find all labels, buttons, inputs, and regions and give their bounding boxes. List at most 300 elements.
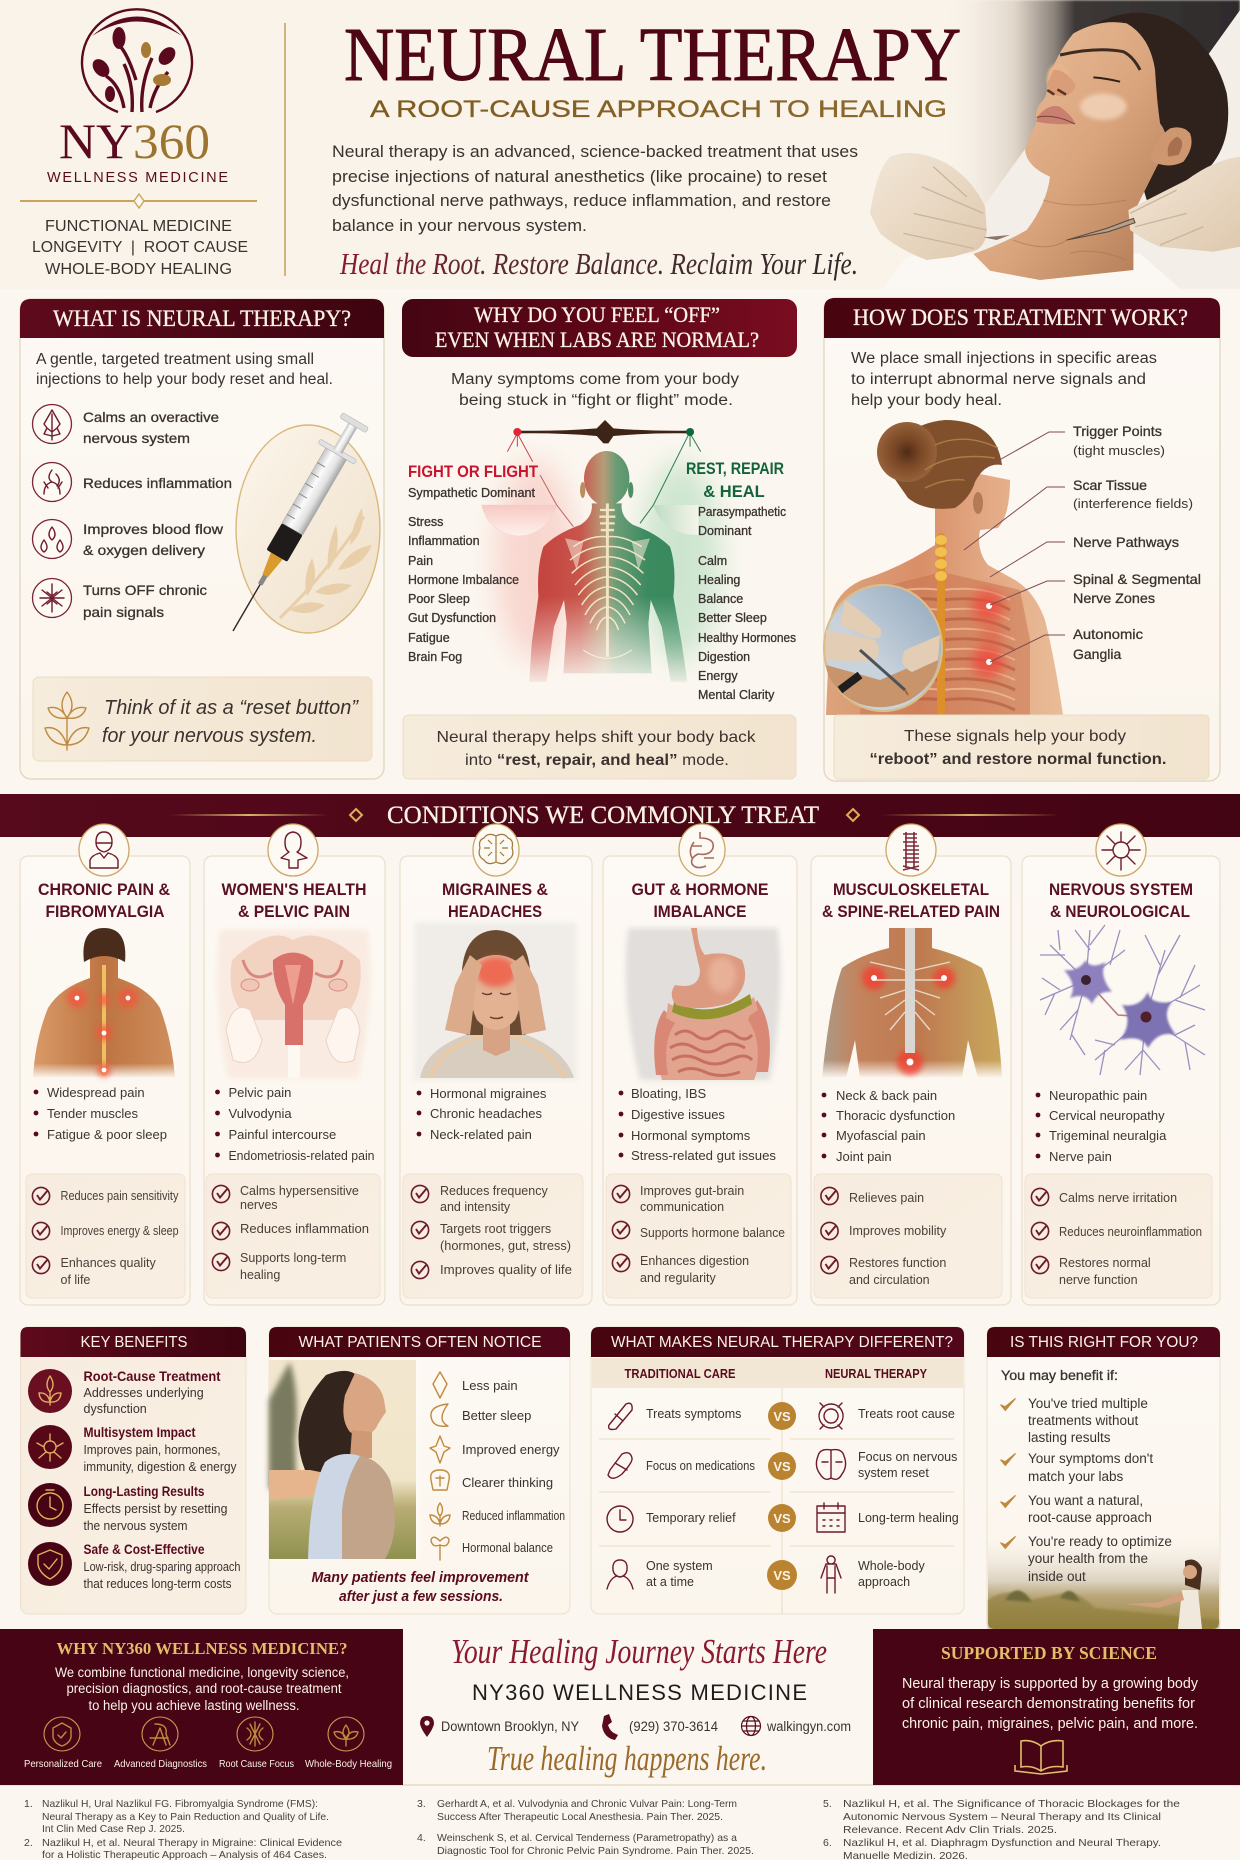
symptoms list: Chronic headaches [430, 1106, 543, 1121]
benefits box: (hormones, gut, stress) [440, 1239, 571, 1253]
leader lines [964, 432, 1065, 662]
benefit text: blood flow [83, 521, 224, 558]
callout text: for your nervous system. [102, 725, 317, 747]
references column 1: Neural Therapy as a Key to Pain Reduction and Quality of Life. [42, 1811, 329, 1823]
caption: Many patients feel improvement [312, 1570, 530, 1586]
symptoms list: Digestive issues [631, 1107, 725, 1122]
gold divider with diamond [20, 194, 257, 208]
benefits box: and regularity [640, 1271, 716, 1285]
rest repair list: Energy [698, 669, 738, 683]
references column 2: Success After Therapeutic Local Anesthesia. Pain Ther. 2025. [437, 1811, 723, 1823]
icons row [44, 1717, 364, 1751]
intro paragraph: dysfunctional nerve pathways, reduce inflammation, and restore [332, 191, 831, 210]
card title: WOMEN'S HEALTH [222, 880, 366, 899]
labels: Scar Tissue [1073, 477, 1147, 493]
card title: & NEUROLOGICAL [1050, 902, 1190, 921]
fight or flight list [408, 463, 538, 664]
benefits box: Improves gut-brain [640, 1184, 744, 1198]
benefit: long-lasting results: the nervous system [84, 1519, 188, 1533]
fight or flight list: Poor Sleep [408, 592, 470, 606]
panel heading: IS THIS RIGHT FOR YOU? [1010, 1334, 1198, 1351]
benefit text: calms: nervous system [83, 430, 190, 446]
symptoms list: Joint pain [836, 1149, 892, 1164]
fight or flight list: Stress [408, 515, 443, 529]
panel heading: WHAT PATIENTS OFTEN NOTICE [298, 1334, 542, 1351]
rest repair list: Better Sleep [698, 611, 767, 625]
panel: contact: Your Healing Journey Starts Here [451, 1632, 827, 1671]
paragraph: precision diagnostics, and root-cause treatment [66, 1681, 342, 1696]
benefits box: Targets root triggers [440, 1222, 551, 1236]
title: NEURAL THERAPY [344, 13, 961, 97]
references column 2: Weinschenk S, et al. Cervical Tenderness (Parametropathy) as a [437, 1832, 737, 1844]
list text: Less pain [462, 1378, 518, 1393]
photo: woman breathing outdoors [269, 1360, 420, 1559]
symptoms list [34, 1085, 167, 1142]
symptoms list: Nerve pain [1049, 1149, 1112, 1164]
benefit text: pain signals: pain signals [83, 604, 164, 620]
benefit text: calms [83, 409, 219, 446]
comparison row 3: VS [773, 1511, 791, 1526]
rest repair list: Healing [698, 573, 740, 587]
benefits box: Enhances quality [60, 1256, 156, 1270]
illustration: back with spine pain points [33, 928, 175, 1078]
list text: Clearer thinking [462, 1475, 553, 1490]
contact row: walkingyn.com [766, 1719, 851, 1734]
symptoms list: Bloating, IBS [631, 1086, 706, 1101]
illustration: woman with headache [414, 922, 577, 1080]
band heading: CONDITIONS WE COMMONLY TREAT [387, 802, 819, 829]
icon: brain [473, 824, 519, 876]
panel: how does treatment work [824, 298, 1220, 781]
card title [442, 880, 548, 921]
intro text: to interrupt abnormal nerve signals and [851, 371, 1146, 388]
benefit: long-lasting results [28, 1483, 228, 1533]
list icons [430, 1372, 450, 1560]
labels: Nerve Pathways [1073, 534, 1179, 550]
comparison row 1: VS [773, 1409, 791, 1424]
panel heading: EVEN WHEN LABS ARE NORMAL? [435, 327, 759, 352]
benefits box [26, 1174, 185, 1298]
comparison row 3 [607, 1503, 959, 1532]
references column 2: 4. [417, 1832, 426, 1844]
logo wordmark NY360: NY360 [59, 113, 210, 169]
comparison row 4: approach [858, 1575, 910, 1589]
checklist: You've tried multiple [1028, 1396, 1148, 1411]
panel: what makes neural therapy different [591, 1327, 964, 1614]
callout text: Think of it as a “reset button” [104, 697, 359, 719]
labels: Nerve Zones [1073, 590, 1155, 606]
comparison row 2: Focus on nervous [858, 1450, 957, 1464]
comparison row 4: at a time [646, 1575, 694, 1589]
checklist: inside out [1028, 1569, 1086, 1584]
benefit text: blood flow: & oxygen delivery [83, 542, 205, 558]
rest repair list: Healthy Hormones [698, 631, 796, 645]
intro text [451, 371, 739, 409]
panel: contact [420, 1632, 851, 1778]
benefit text: pain signals [83, 582, 207, 620]
benefit: multisystem impact: immunity, digestion & energy [84, 1460, 237, 1474]
references column 1: Nazlikul H, et al. Neural Therapy in Migraine: Clinical Evidence [42, 1837, 342, 1849]
fight or flight list: Hormone Imbalance [408, 573, 519, 587]
fight or flight list: Inflammation [408, 534, 480, 548]
icon: intestines [679, 824, 725, 876]
intro paragraph: balance in your nervous system. [332, 216, 587, 235]
references column 2: 3. [417, 1798, 426, 1810]
card title: & PELVIC PAIN [238, 902, 350, 921]
card title: MUSCULOSKELETAL [833, 880, 989, 899]
checklist: match your labs [1028, 1469, 1124, 1484]
comparison row 1 [609, 1402, 955, 1430]
benefit: safe and cost-effective: that reduces long-term costs [84, 1577, 232, 1591]
references column 3: Nazlikul H, et al. The Significance of Thoracic Blockages for the [843, 1798, 1180, 1810]
symptoms list: Widespread pain [47, 1085, 145, 1100]
body illustration with balance scale [482, 420, 720, 682]
panel heading: KEY BENEFITS [80, 1334, 188, 1351]
header photo: neural therapy injection in neck [840, 0, 1240, 302]
callout: reset button [33, 677, 372, 761]
callout: reboot [834, 715, 1209, 779]
benefits box: and intensity [440, 1200, 511, 1214]
benefits box [1025, 1174, 1212, 1298]
logo taglines [32, 218, 248, 278]
fight or flight list: Fatigue [408, 631, 450, 645]
symptoms list: Cervical neuropathy [1049, 1108, 1165, 1123]
panel heading [402, 299, 797, 357]
list text: Improved energy [462, 1442, 560, 1457]
symptoms list: Stress-related gut issues [631, 1148, 776, 1163]
benefits box: communication [640, 1200, 724, 1214]
benefit: safe and cost-effective: Safe & Cost-Effective [84, 1542, 205, 1557]
panel heading [269, 1327, 570, 1357]
benefit text: pain signals: Turns OFF chronic [83, 582, 207, 598]
intro paragraph: Neural therapy is an advanced, science-backed treatment that uses [332, 142, 858, 161]
intro text: A gentle, targeted treatment using small [36, 351, 314, 368]
references column 3: Autonomic Nervous System – Neural Therapy and Its Clinical [843, 1811, 1161, 1823]
fight or flight list: Pain [408, 554, 433, 568]
benefit: root-cause treatment: Addresses underlying [84, 1386, 204, 1400]
paragraph: of clinical research demonstrating benefits for [902, 1696, 1195, 1712]
intro text: help your body heal. [851, 392, 1002, 409]
paragraph: Neural therapy is supported by a growing body [902, 1676, 1199, 1692]
symptoms list [822, 1088, 955, 1164]
rest repair list: Digestion [698, 650, 750, 664]
comparison row 4: One system [646, 1559, 713, 1573]
benefits box [403, 1174, 583, 1298]
checklist: You're ready to optimize [1028, 1534, 1172, 1549]
logo taglines: LONGEVITY | ROOT CAUSE [32, 239, 248, 256]
icon labels: Advanced Diagnostics [114, 1758, 207, 1770]
icon labels: Personalized Care [24, 1758, 102, 1770]
illustration: digestive system [626, 928, 780, 1080]
benefit: multisystem impact [28, 1425, 237, 1474]
card title [1049, 880, 1193, 921]
woman's back illustration [824, 420, 1063, 715]
icon: inflammation [32, 462, 72, 502]
callout: rest repair heal: into “rest, repair, and heal” mode. [465, 752, 729, 769]
logo wellness medicine: WELLNESS MEDICINE [47, 170, 228, 186]
symptoms list: Hormonal migraines [430, 1086, 547, 1101]
symptoms list: Pelvic pain [228, 1085, 291, 1100]
benefit: root-cause treatment: Root-Cause Treatment [84, 1369, 221, 1384]
panel: contact: NY360 WELLNESS MEDICINE [472, 1680, 807, 1705]
symptoms list: Painful intercourse [228, 1127, 336, 1142]
references column 3 [823, 1798, 1180, 1860]
labels: (interference fields) [1073, 496, 1193, 511]
benefits box: Reduces frequency [440, 1184, 548, 1198]
caption [312, 1570, 530, 1605]
intro text: being stuck in “fight or flight” mode. [459, 392, 733, 409]
callout: rest repair heal: Neural therapy helps shift your body back [436, 729, 757, 746]
card title: MIGRAINES & [442, 880, 548, 899]
illustration: pelvis and uterus [217, 930, 370, 1078]
benefit: long-lasting results: Effects persist by resetting [84, 1502, 228, 1516]
icon: open book [1015, 1741, 1067, 1774]
list text: Better sleep [462, 1408, 531, 1423]
checklist: treatments without [1028, 1413, 1139, 1428]
benefit: safe and cost-effective: Low-risk, drug-sparing approach [84, 1560, 241, 1574]
benefits box: Calms nerve irritation [1059, 1191, 1177, 1205]
tagline: Heal the Root. Restore Balance. Reclaim Your Life. [339, 246, 858, 281]
card title [822, 880, 1000, 921]
labels: (tight muscles) [1073, 443, 1165, 458]
references column 2 [417, 1798, 754, 1857]
intro text [851, 350, 1157, 409]
benefits box: of life [60, 1273, 90, 1287]
illustration: neurons [1040, 925, 1205, 1075]
references column 3: 5. [823, 1798, 832, 1810]
references column 1 [24, 1798, 342, 1860]
lead-in: You may benefit if: [1001, 1368, 1118, 1383]
card title: IMBALANCE [654, 902, 746, 921]
symptoms list [417, 1086, 547, 1142]
benefits box: Restores function [849, 1256, 946, 1270]
symptoms list [215, 1085, 374, 1163]
comparison row 2: VS [773, 1459, 791, 1474]
symptoms list: Neuropathic pain [1049, 1088, 1147, 1103]
comparison row 4: Whole-body [858, 1559, 925, 1573]
icon labels: Root Cause Focus [219, 1758, 294, 1770]
labels [1073, 423, 1201, 662]
benefits box: Reduces inflammation [240, 1222, 369, 1236]
panel heading [987, 1327, 1220, 1357]
caption: after just a few sessions. [339, 1589, 503, 1605]
benefit text: inflammation: Reduces inflammation [83, 475, 232, 491]
checklist [1001, 1396, 1172, 1584]
fight or flight list: FIGHT OR FLIGHT [408, 463, 538, 481]
card: nervous system [1022, 824, 1220, 1305]
card: gut and hormone imbalance [603, 824, 797, 1305]
icon labels [24, 1758, 392, 1770]
card: chronic pain and fibromyalgia [20, 824, 190, 1305]
footer band [0, 1629, 1240, 1786]
panel: why NY360 [0, 1629, 403, 1785]
comparison row 2: Focus on medications [646, 1459, 755, 1473]
references column 1: Nazlikul H, Ural Nazlikul FG. Fibromyalgia Syndrome (FMS): [42, 1798, 318, 1810]
fight or flight list: Gut Dysfunction [408, 611, 496, 625]
paragraph: to help you achieve lasting wellness. [88, 1698, 300, 1713]
comparison header: NEURAL THERAPY [825, 1367, 928, 1381]
benefits box [606, 1174, 791, 1298]
benefit: safe and cost-effective [28, 1542, 241, 1591]
symptoms list: Fatigue & poor sleep [47, 1127, 167, 1142]
header [0, 0, 1240, 302]
rest repair list: REST, REPAIR [686, 460, 784, 478]
icon: tree of life in circle [82, 9, 192, 112]
labels: Spinal & Segmental [1073, 571, 1201, 587]
card title [222, 880, 366, 921]
icon: neuron [1096, 824, 1146, 876]
logo taglines: FUNCTIONAL MEDICINE [45, 218, 232, 235]
panel: contact: True healing happens here. [487, 1739, 767, 1778]
comparison row 2: system reset [858, 1466, 929, 1480]
icon: person [79, 824, 129, 876]
benefits box: nerve function [1059, 1273, 1138, 1287]
checklist: root-cause approach [1028, 1510, 1152, 1525]
icon: pain signals [32, 578, 72, 618]
benefits box: Relieves pain [849, 1191, 924, 1205]
panel heading: WHY DO YOU FEEL “OFF” [474, 302, 720, 327]
references column 2: Gerhardt A, et al. Vulvodynia and Chronic Vulvar Pain: Long-Term [437, 1798, 737, 1810]
labels: Ganglia [1073, 646, 1121, 662]
benefits box [206, 1174, 380, 1298]
comparison row 3: Temporary relief [646, 1511, 736, 1525]
panel: what is neural therapy [20, 299, 384, 779]
paragraph [902, 1676, 1199, 1732]
logo [20, 9, 257, 278]
rest repair list: & HEAL [703, 483, 765, 501]
symptoms list: Thoracic dysfunction [836, 1108, 955, 1123]
comparison row 4: VS [773, 1568, 791, 1583]
card title: FIBROMYALGIA [46, 902, 164, 921]
references column 1: Int Clin Med Case Rep J. 2025. [42, 1823, 185, 1835]
icon: calms nervous system [32, 404, 72, 444]
callout: reboot: “reboot” and restore normal function. [870, 751, 1166, 768]
benefit: root-cause treatment: dysfunction [84, 1402, 147, 1416]
logo taglines: WHOLE-BODY HEALING [45, 261, 232, 278]
rest repair list: Mental Clarity [698, 688, 775, 702]
syringe illustration [215, 410, 380, 642]
panel: supported by science: SUPPORTED BY SCIENCE [941, 1643, 1157, 1663]
panel heading [824, 298, 1220, 338]
card title: CHRONIC PAIN & [38, 880, 170, 899]
panel: key benefits [20, 1327, 246, 1614]
intro text: We place small injections in specific areas [851, 350, 1157, 367]
panel heading: WHAT IS NEURAL THERAPY? [53, 306, 351, 331]
icon: blood flow [32, 520, 72, 558]
card title [38, 880, 170, 921]
benefits box: nerves [240, 1198, 278, 1212]
panel: supported by science [873, 1629, 1240, 1785]
benefits box [814, 1174, 1002, 1298]
benefits box: Improves mobility [849, 1224, 947, 1238]
checklist: lasting results [1028, 1430, 1111, 1445]
references column 1: 2. [24, 1837, 33, 1849]
image: woman in landscape [988, 1533, 1219, 1629]
contact row: (929) 370-3614 [629, 1719, 718, 1734]
rest repair list: Dominant [698, 524, 752, 538]
panel heading: WHAT MAKES NEURAL THERAPY DIFFERENT? [611, 1334, 953, 1351]
benefits box: and circulation [849, 1273, 930, 1287]
fight or flight list: Sympathetic Dominant [408, 486, 536, 500]
references column 3: Relevance. Recent Adv Clin Trials. 2025. [843, 1824, 1057, 1836]
benefit: multisystem impact: Multisystem Impact [84, 1425, 196, 1440]
card: women's health [204, 824, 385, 1305]
contact row: Downtown Brooklyn, NY [441, 1719, 579, 1734]
intro text: Many symptoms come from your body [451, 371, 739, 388]
checklist: You want a natural, [1028, 1493, 1143, 1508]
comparison header [592, 1358, 963, 1388]
panel heading [591, 1327, 964, 1357]
panel: is this right for you [987, 1327, 1220, 1629]
icon: golden leaves [45, 692, 89, 750]
panel: why do you feel off [402, 299, 797, 779]
fight or flight list: Brain Fog [408, 650, 462, 664]
intro paragraph [332, 142, 858, 235]
references [24, 1798, 1180, 1860]
symptoms list: Tender muscles [47, 1106, 139, 1121]
symptoms list: Myofascial pain [836, 1128, 926, 1143]
benefits box: Improves quality of life [440, 1263, 572, 1277]
contact row [420, 1714, 851, 1740]
panel: what patients often notice [269, 1327, 570, 1614]
intro paragraph: precise injections of natural anesthetics (like procaine) to reset [332, 167, 827, 186]
benefits box: Improves energy & sleep [60, 1224, 179, 1238]
benefit: root-cause treatment [28, 1369, 221, 1416]
callout: reboot: These signals help your body [904, 728, 1126, 745]
icon labels: Whole-Body Healing [305, 1758, 392, 1770]
paragraph [55, 1665, 349, 1713]
list text [462, 1378, 565, 1555]
benefit text: calms: Calms an overactive [83, 409, 219, 425]
panel heading [20, 1327, 246, 1357]
references column 3: Nazlikul H, et al. Diaphragm Dysfunction and Neural Therapy. [843, 1837, 1161, 1849]
rest repair list: Calm [698, 554, 727, 568]
inset: close-up injection [824, 585, 942, 711]
callout: rest repair heal [403, 715, 796, 779]
rest repair list [686, 460, 796, 702]
benefit: multisystem impact: Improves pain, hormones, [84, 1443, 220, 1457]
panel: why NY360: WHY NY360 WELLNESS MEDICINE? [56, 1639, 348, 1658]
comparison row 1: Treats symptoms [646, 1407, 741, 1421]
symptoms list [619, 1086, 776, 1163]
symptoms list: Hormonal symptoms [631, 1128, 751, 1143]
comparison row 3: Long-term healing [858, 1511, 959, 1525]
symptoms list: Neck & back pain [836, 1088, 937, 1103]
icon: woman [268, 824, 318, 876]
benefits box: Calms hypersensitive [240, 1184, 359, 1198]
symptoms list: Vulvodynia [228, 1106, 292, 1121]
card title: & SPINE-RELATED PAIN [822, 902, 1000, 921]
benefits box: Enhances digestion [640, 1254, 749, 1268]
comparison row 1: Treats root cause [858, 1407, 955, 1421]
checklist: your health from the [1028, 1551, 1148, 1566]
card title [632, 880, 768, 921]
card title: HEADACHES [448, 902, 542, 921]
symptoms list [1036, 1088, 1167, 1164]
benefits box: Supports long-term [240, 1251, 346, 1265]
rest repair list: Balance [698, 592, 743, 606]
rest repair list: Parasympathetic [698, 505, 786, 519]
labels: Trigger Points [1073, 423, 1162, 439]
subtitle: A ROOT-CAUSE APPROACH TO HEALING [370, 96, 947, 123]
benefits box: Reduces pain sensitivity [60, 1189, 179, 1203]
references column 1: 1. [24, 1798, 33, 1810]
paragraph: We combine functional medicine, longevity science, [55, 1665, 349, 1680]
benefit: long-lasting results: Long-Lasting Results [84, 1484, 204, 1499]
panel heading [20, 299, 384, 338]
benefit text: blood flow: Improves blood flow [83, 521, 224, 537]
balance scale [482, 420, 701, 536]
